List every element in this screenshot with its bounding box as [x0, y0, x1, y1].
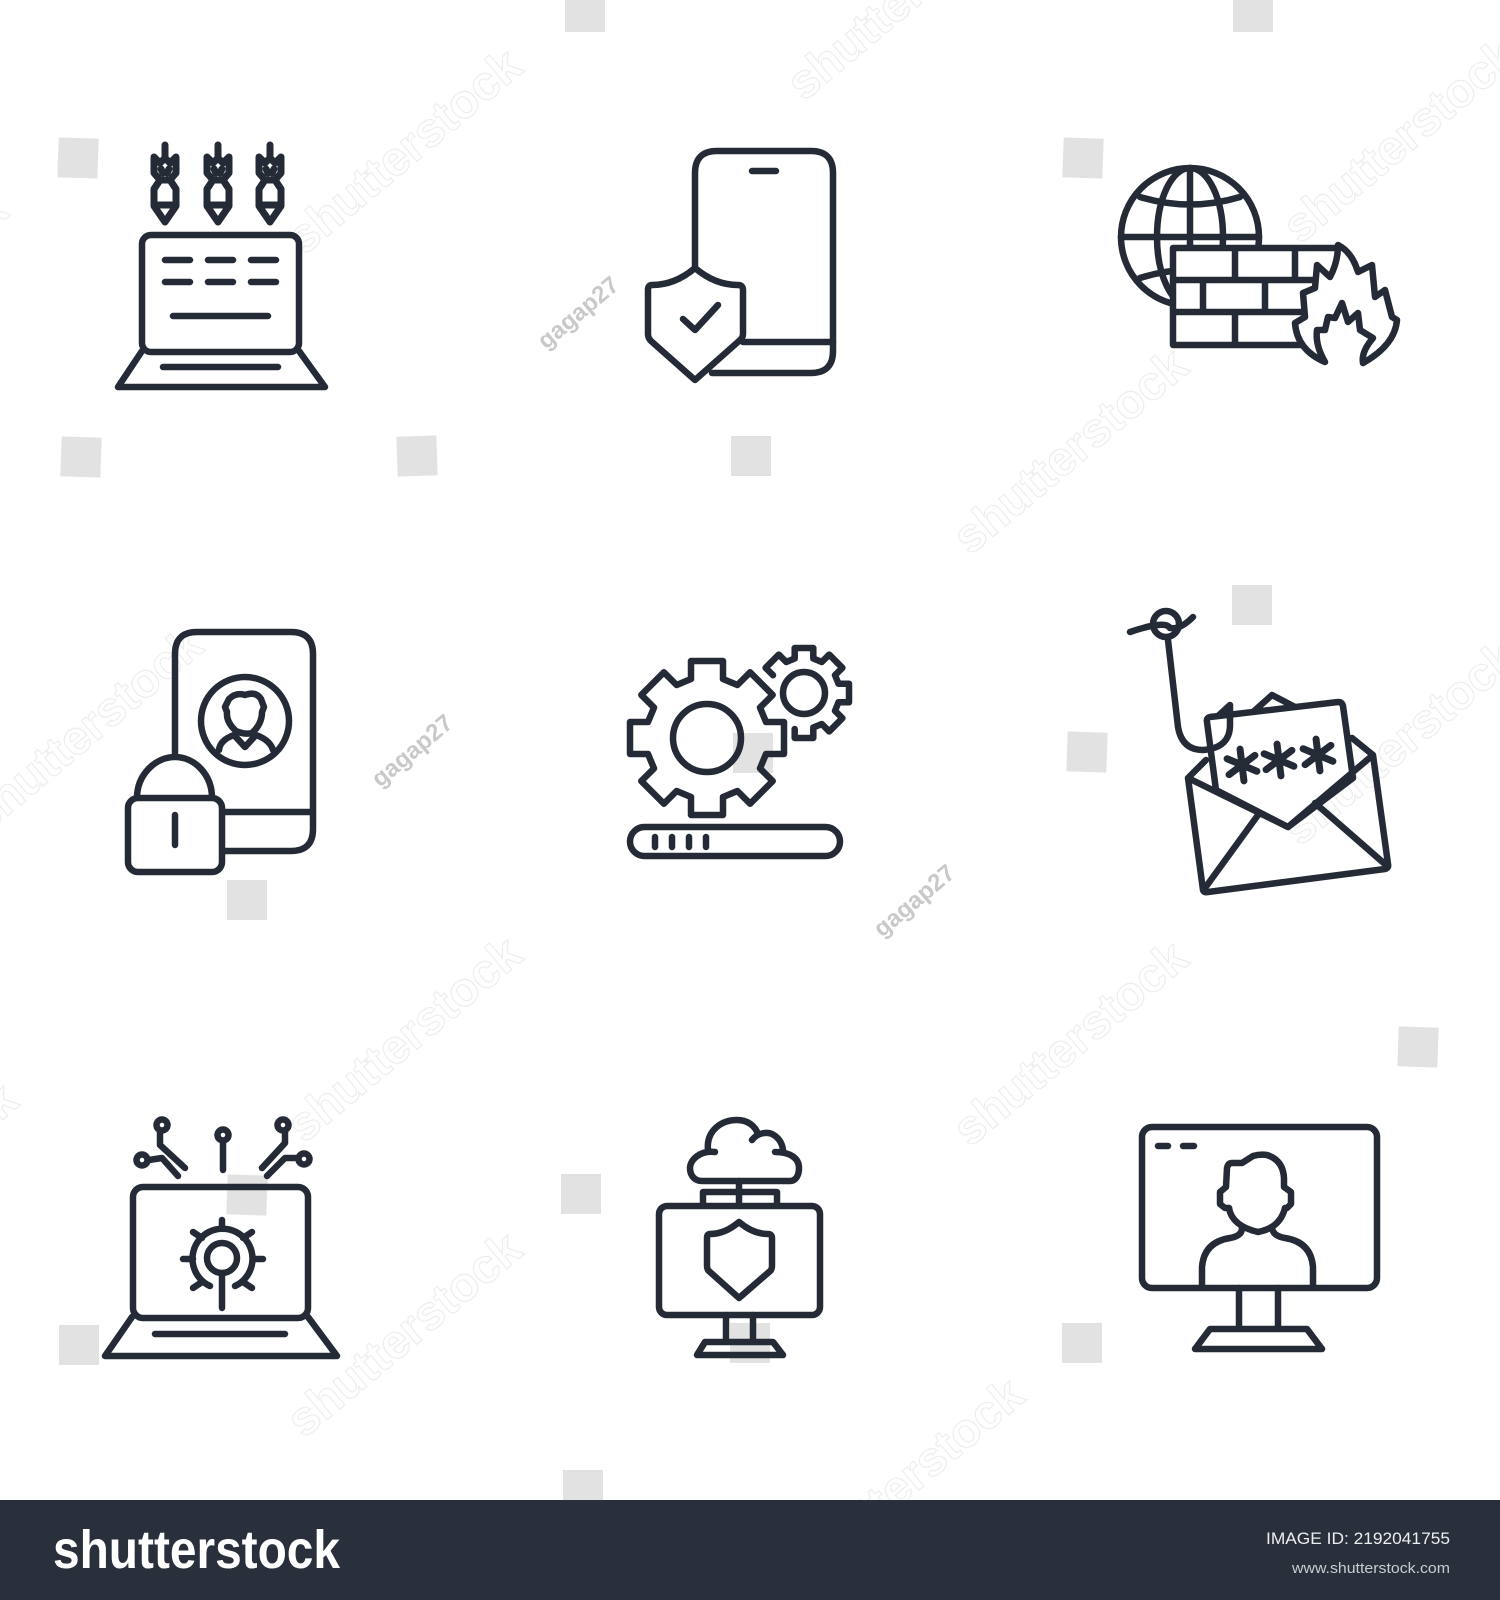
icon: monitor with user portrait [1142, 1127, 1377, 1349]
watermarks: gagap27 [869, 859, 960, 943]
watermarks: shutterstock [277, 1221, 532, 1447]
icon: phishing hook and password envelope [1130, 611, 1388, 892]
watermarks: gagap27 [367, 709, 458, 793]
site url: www.shutterstock.com [1291, 1560, 1450, 1577]
watermarks: shutterstock [779, 1367, 1034, 1593]
watermarks: shutterstock [277, 926, 532, 1152]
icon: phone with profile and padlock [128, 632, 313, 872]
icon: globe behind burning firewall [1121, 168, 1397, 363]
watermarks: shutterstock [943, 338, 1198, 564]
watermarks: shutterstock [943, 930, 1198, 1156]
watermarks: shutterstock [277, 38, 532, 264]
icon: cloud linked to shielded monitor [659, 1120, 820, 1355]
watermarks: gagap27 [533, 271, 624, 355]
icon: phone with shield check [648, 151, 833, 380]
image id: IMAGE ID: 2192041755 [1266, 1529, 1450, 1548]
footer logo: shutterstock [53, 1520, 341, 1580]
icon: laptop with circuit target [105, 1120, 337, 1356]
icon: gears with progress bar [630, 648, 849, 856]
footer bar [0, 1500, 1500, 1600]
icon: laptop under missile attack [118, 145, 325, 387]
